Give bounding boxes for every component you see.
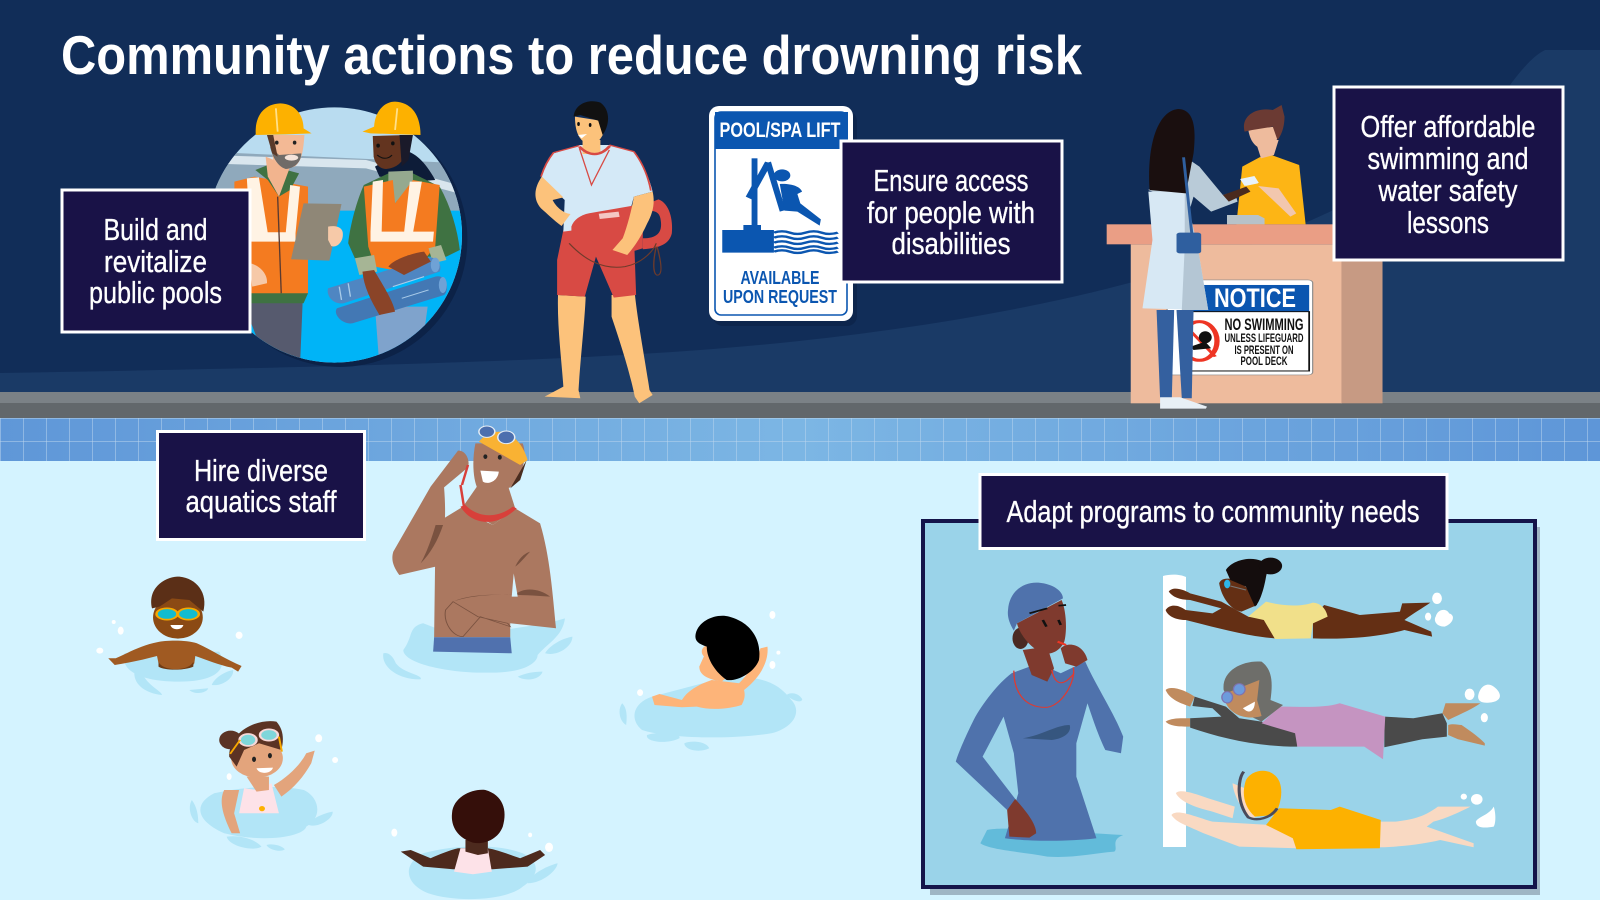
illustration: construction workers in circle xyxy=(205,102,467,367)
child with black hair from behind xyxy=(620,611,802,751)
callout box: offer affordable lessons: Offer affordable xyxy=(1360,110,1536,144)
swimmers at the wall xyxy=(1166,558,1500,849)
notice sign: POOL DECK xyxy=(1240,354,1288,368)
title: Community actions to reduce drowning risk xyxy=(61,24,1082,86)
sign footer text: UPON REQUEST xyxy=(723,287,837,307)
pool lift sign xyxy=(709,106,857,326)
callout box: offer affordable lessons: swimming and xyxy=(1368,142,1528,176)
pool tile band xyxy=(0,418,1600,461)
patron xyxy=(1142,109,1259,409)
illustration: lifeguard with rescue tube xyxy=(535,101,672,403)
callout box: build and revitalize xyxy=(62,190,250,332)
child with pink swimsuit xyxy=(190,721,338,851)
sign header: POOL/SPA LIFT xyxy=(720,119,841,142)
desk xyxy=(1107,224,1383,403)
instructor in water xyxy=(383,426,572,679)
illustration: swimmers in the pool xyxy=(96,426,802,899)
child with dark hair from behind xyxy=(391,790,558,899)
callout box: adapt programs xyxy=(980,474,1447,548)
callout box: ensure access: Ensure access xyxy=(874,164,1028,198)
callout box: ensure access: disabilities xyxy=(892,227,1010,261)
notice sign: NO SWIMMING xyxy=(1224,315,1304,334)
callout box: hire diverse: Hire diverse xyxy=(194,454,328,488)
swimmer in modest swimwear xyxy=(1166,661,1500,759)
sign footer text: AVAILABLE xyxy=(740,268,820,288)
callout box: hire diverse: aquatics staff xyxy=(186,485,337,519)
illustration: instructor with whistle xyxy=(956,583,1123,857)
callout box: offer affordable lessons: lessons xyxy=(1407,206,1489,240)
lighter background curve xyxy=(0,50,1600,392)
callout box: adapt programs: Adapt programs to community needs xyxy=(1006,495,1420,529)
sign footer text xyxy=(723,268,837,307)
notice sign: NOTICE xyxy=(1214,283,1296,313)
icon: pool lift xyxy=(722,158,838,253)
callout box: offer affordable lessons xyxy=(1334,87,1563,260)
callout box: build and revitalize: Build and xyxy=(104,213,208,247)
callout box: offer affordable lessons: water safety xyxy=(1378,174,1518,208)
callout box: build and revitalize: public pools xyxy=(89,276,222,310)
swimmer in yellow suit xyxy=(1166,558,1453,639)
water xyxy=(0,461,1600,900)
desk with clerk and patron xyxy=(1107,105,1383,409)
notice sign: IS PRESENT ON xyxy=(1234,343,1294,357)
sign header xyxy=(715,112,848,149)
panel: adapt programs xyxy=(923,521,1540,895)
callout box: hire diverse xyxy=(158,432,364,540)
pool wall xyxy=(1163,575,1186,847)
right worker xyxy=(328,102,460,323)
notice sign xyxy=(1167,280,1313,375)
callout box: ensure access xyxy=(841,141,1062,282)
clerk xyxy=(1227,105,1306,224)
callout box: build and revitalize: revitalize xyxy=(104,245,207,279)
callout box: ensure access: for people with xyxy=(867,196,1035,230)
blueprint rolls xyxy=(328,258,447,323)
child with yellow goggles xyxy=(96,577,243,695)
swimmer in orange cap xyxy=(1171,771,1495,849)
pool deck xyxy=(0,392,1600,418)
notice sign: UNLESS LIFEGUARD xyxy=(1224,331,1304,345)
navy sky background xyxy=(0,0,1600,392)
left worker xyxy=(234,103,343,303)
